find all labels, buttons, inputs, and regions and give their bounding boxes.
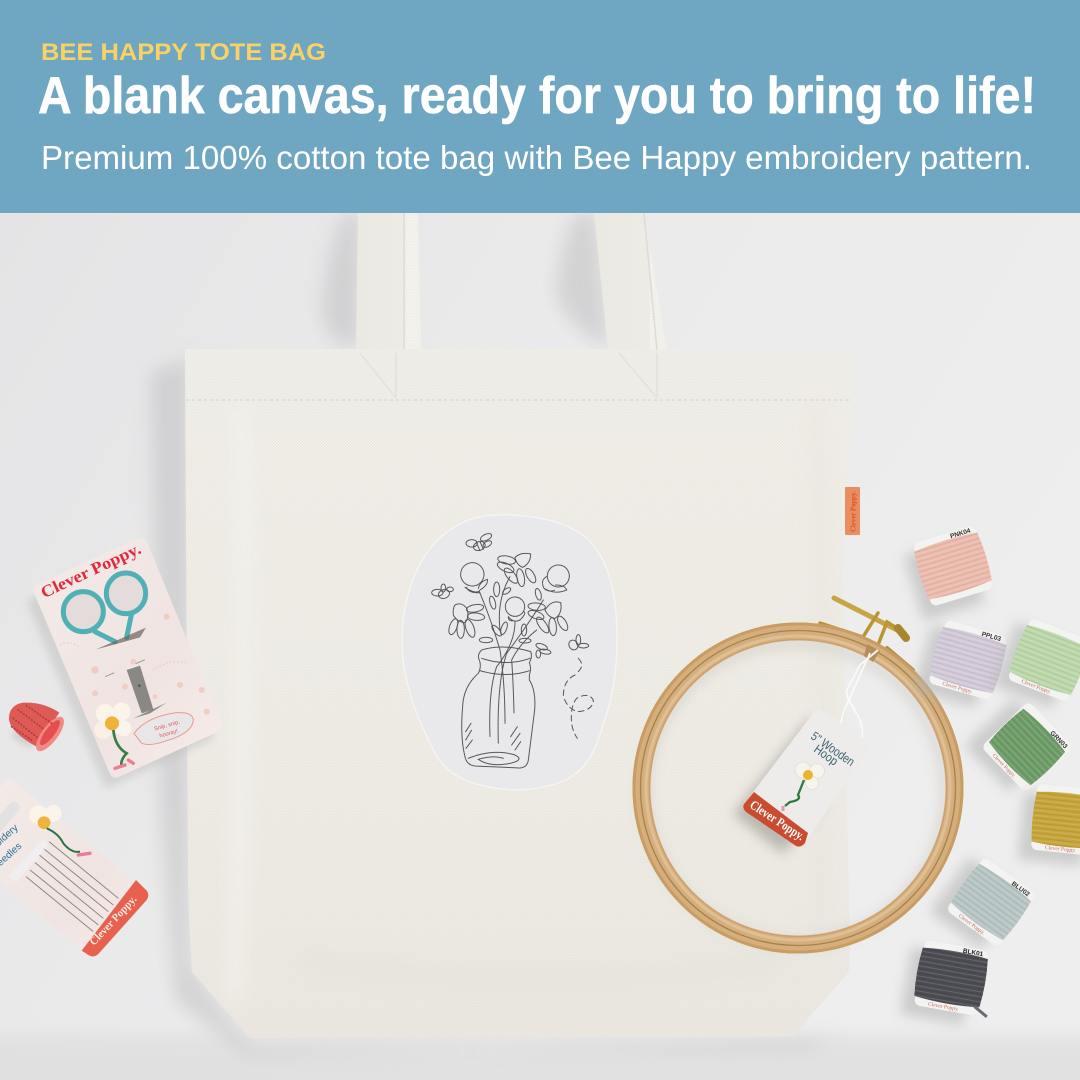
bees [466, 532, 493, 552]
jar [462, 647, 535, 768]
woven orange side label: Clever Poppy. [850, 491, 858, 532]
tag brand name: Clever Poppy. [747, 797, 808, 843]
embroidery hoop with tag [634, 598, 962, 952]
wooden ring [634, 624, 962, 952]
hoop tag: Hoop [811, 742, 841, 768]
card brand name: Clever Poppy. [38, 539, 144, 602]
scissors card [27, 537, 222, 787]
charcoal thread BLK01 [900, 938, 998, 1029]
right daisy [545, 602, 561, 618]
scissors [63, 573, 167, 718]
pink thread PNK04 [901, 524, 999, 621]
brass clamp [820, 598, 913, 670]
band brand name: Clever Poppy. [87, 893, 140, 948]
blue-grey thread BLU02 [930, 849, 1037, 957]
round flowers [461, 563, 484, 586]
charcoal thread BLK01: Clever Poppy. [928, 1001, 960, 1013]
flower mascot [94, 703, 133, 768]
stems [479, 577, 543, 743]
embroidery pattern patch [402, 515, 617, 790]
hoop tag [733, 709, 870, 854]
bag body [185, 349, 855, 1038]
hem stitching and folds [186, 353, 850, 1000]
yellow thread: Clever Poppy. [1045, 845, 1077, 854]
subtitle: Premium 100% cotton tote bag with Bee Happy embroidery pattern. [41, 139, 1032, 176]
tag title: 5" Wooden [808, 729, 857, 769]
pale leaf pattern [60, 590, 210, 715]
left strap [356, 213, 421, 350]
thread bobbins [900, 524, 1080, 1029]
top daisy [515, 553, 531, 567]
leaves [494, 582, 500, 597]
blue-grey thread BLU02: Clever Poppy. [957, 913, 986, 937]
lilac thread PPL03: PPL03 [981, 631, 1002, 643]
hanger slot [0, 807, 14, 828]
yellow thread [1018, 783, 1080, 867]
header banner [0, 0, 1080, 213]
light green thread: Clever Poppy. [1020, 679, 1052, 696]
tote bag [150, 213, 860, 1056]
lilac thread PPL03 [914, 616, 1010, 712]
left daisy [453, 604, 468, 623]
pink thread PNK04: PNK04 [949, 527, 972, 540]
needle card [0, 780, 148, 956]
speech bubble [134, 713, 193, 745]
tote cast shadows [150, 213, 840, 1056]
woven orange side label [845, 487, 860, 535]
green thread GRN03: Clever Poppy. [991, 753, 1017, 780]
tag flower mascot [783, 762, 824, 811]
green thread GRN03: GRN03 [1048, 730, 1069, 751]
tag red band [743, 792, 808, 847]
hoop shadow [645, 643, 945, 943]
charcoal thread BLK01: BLK01 [962, 948, 984, 958]
speech bubble: Snip, snip, [154, 719, 181, 733]
light green thread [992, 613, 1080, 713]
lilac thread PPL03: Clever Poppy. [942, 681, 974, 696]
needles [26, 842, 118, 932]
red brand band [82, 880, 148, 956]
needle card mascot [29, 805, 90, 855]
speech bubble: hooray! [159, 729, 179, 740]
red thimble [9, 703, 69, 755]
bee flight path [563, 658, 593, 738]
stamped flower jar drawing [432, 532, 593, 768]
wooden clamp block [864, 644, 880, 662]
right strap [594, 213, 667, 350]
blue-grey thread BLU02: BLU02 [1010, 880, 1031, 898]
green thread GRN03 [965, 692, 1073, 801]
eyebrow: BEE HAPPY TOTE BAG [41, 39, 326, 66]
hanging string [838, 650, 878, 747]
needle threader [8, 838, 48, 882]
